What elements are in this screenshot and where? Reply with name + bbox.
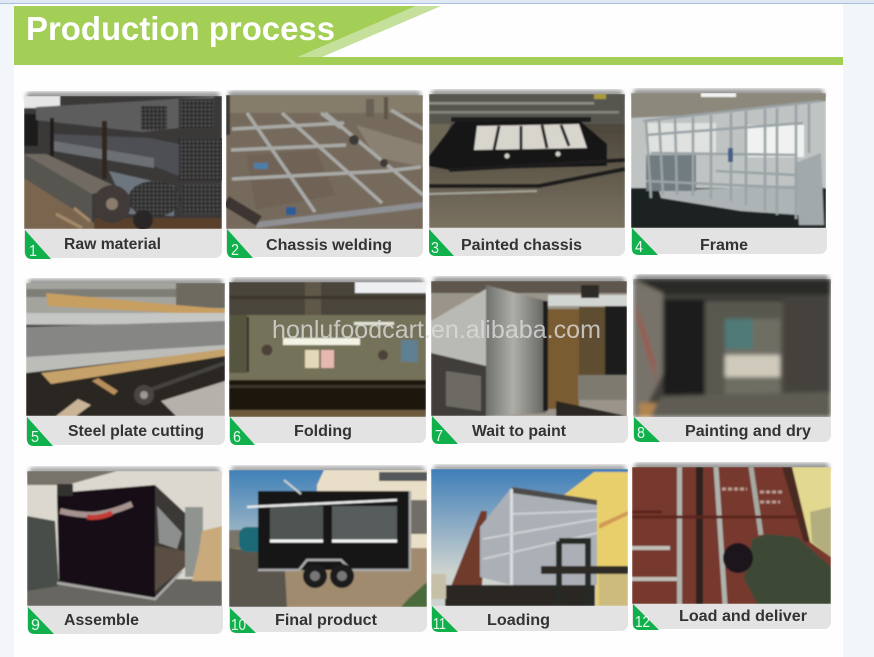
number badge: 10 — [231, 617, 246, 634]
caption: Painted chassis — [461, 237, 582, 254]
caption: Painting and dry — [685, 423, 811, 440]
card 4: frame — [631, 89, 827, 256]
card 3: painted chassis — [429, 90, 625, 257]
caption: Frame — [700, 237, 748, 254]
number badge: 11 — [433, 616, 446, 633]
card 5: steel plate cutting — [26, 279, 225, 446]
card 1: raw material — [24, 92, 225, 260]
number badge — [432, 606, 458, 633]
number badge: 8 — [637, 425, 645, 442]
number badge — [632, 228, 658, 256]
caption: Final product — [275, 612, 377, 629]
photo: wrapped cart on truck — [431, 469, 628, 606]
caption: Assemble — [64, 612, 139, 629]
number badge — [230, 608, 256, 634]
caption: Load and deliver — [679, 608, 807, 625]
photo: paint room — [633, 279, 831, 417]
photo: black cart in workshop — [27, 471, 222, 606]
number badge: 3 — [431, 240, 439, 257]
number badge — [28, 607, 54, 634]
number badge — [634, 417, 660, 442]
photo: steel plates on timber — [26, 283, 225, 416]
card 11: loading — [431, 465, 628, 633]
photo: container and worker — [632, 467, 831, 604]
number badge: 4 — [635, 239, 643, 256]
number badge: 1 — [29, 243, 37, 260]
caption: Wait to paint — [472, 423, 566, 440]
caption: Chassis welding — [266, 237, 392, 254]
number badge — [27, 417, 53, 446]
caption: Steel plate cutting — [68, 423, 204, 440]
number badge — [25, 230, 51, 260]
card 7: wait to paint — [431, 277, 628, 445]
card 2: chassis welding — [226, 91, 423, 259]
card 8: painting and dry — [633, 275, 831, 442]
number badge: 9 — [31, 617, 40, 634]
card 9: assemble — [27, 467, 223, 634]
number badge — [230, 417, 255, 446]
title: Production process — [26, 10, 335, 47]
photo: steel tubes — [24, 96, 222, 229]
card 12: load and deliver — [632, 463, 831, 631]
card 10: final product — [229, 466, 427, 634]
photo: chassis frame — [226, 95, 423, 229]
number badge — [633, 604, 659, 631]
watermark: honlufoodcart.en.alibaba.com — [272, 316, 601, 344]
caption: Loading — [487, 612, 550, 629]
number badge: 6 — [233, 429, 241, 446]
number badge: 5 — [31, 429, 39, 446]
card 6: folding — [229, 278, 426, 446]
photo: painted chassis — [429, 94, 625, 228]
header banner — [14, 6, 843, 65]
number badge — [227, 229, 253, 259]
photo: paint booth — [431, 281, 627, 416]
number badge: 12 — [635, 614, 650, 631]
number badge: 7 — [435, 428, 443, 445]
number badge — [429, 229, 454, 257]
caption: Folding — [294, 423, 352, 440]
caption: Raw material — [64, 236, 161, 253]
photo: folding machine — [229, 282, 426, 417]
number badge — [432, 416, 458, 445]
number badge: 2 — [231, 242, 239, 259]
photo: finished trailer — [229, 470, 427, 607]
photo: steel frame — [631, 93, 826, 228]
